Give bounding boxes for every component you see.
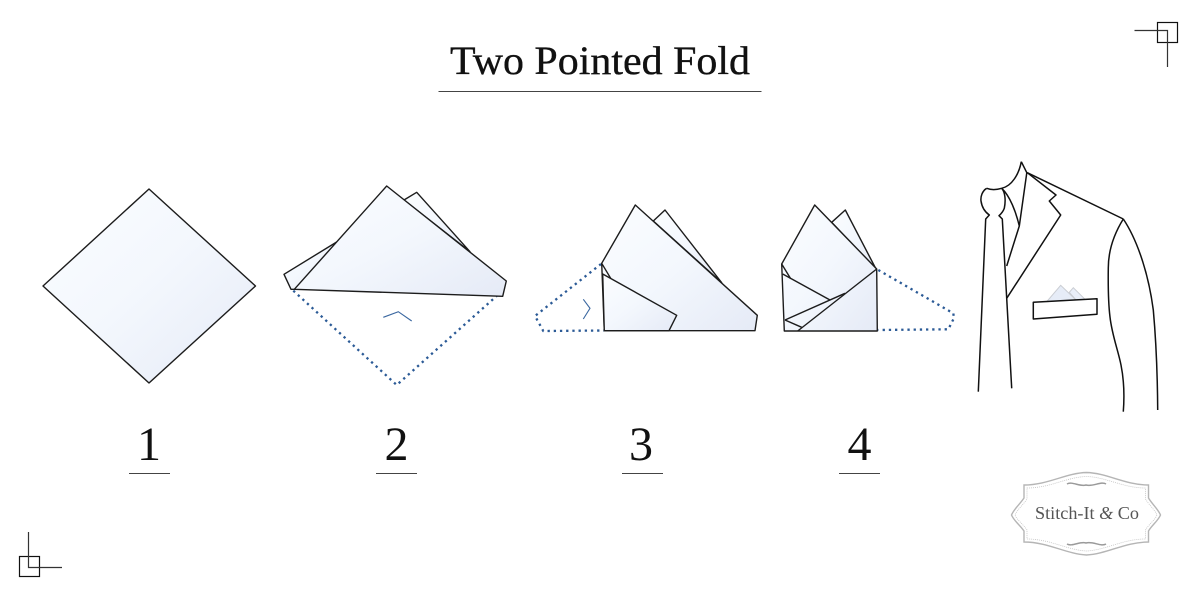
back layer — [832, 210, 876, 269]
tie — [978, 188, 1012, 392]
neck and collar — [987, 162, 1021, 190]
short crease — [602, 263, 611, 278]
number 2: 2 — [384, 418, 408, 471]
pocket square back — [1069, 288, 1085, 300]
number 3 — [622, 418, 663, 474]
front layer — [294, 186, 506, 296]
back layer right — [404, 192, 470, 252]
fold guide dots — [878, 270, 954, 330]
badge outline — [1012, 472, 1160, 555]
fold guide dots — [535, 264, 604, 331]
number 2 — [376, 418, 417, 474]
corner mark: bottom left — [20, 532, 62, 576]
fold creases — [782, 264, 877, 331]
ornament top — [1067, 483, 1106, 485]
badge inner dotted border — [1015, 476, 1157, 551]
step 2: first fold — [284, 186, 506, 385]
pocket square front — [1047, 285, 1076, 302]
front layer — [602, 205, 757, 331]
shoulder — [1027, 173, 1123, 219]
jacket illustration — [978, 162, 1158, 412]
corner mark: top right — [1134, 22, 1178, 67]
ornament bottom — [1067, 543, 1106, 545]
title: Two Pointed Fold — [450, 38, 750, 83]
number 1: 1 — [137, 418, 161, 471]
sleeve outer — [1123, 219, 1158, 410]
breast pocket — [1033, 299, 1097, 319]
lapel — [1007, 173, 1061, 298]
fold arrow — [583, 299, 590, 319]
number 3: 3 — [629, 418, 653, 471]
back layer left — [284, 241, 338, 289]
step 3: left corner fold — [535, 205, 757, 331]
pocket outline — [782, 205, 877, 331]
brand name: Stitch-It & Co — [1035, 503, 1139, 523]
step numbers — [129, 418, 880, 474]
step 4: right corner fold — [782, 205, 954, 331]
number 1 — [129, 418, 170, 474]
fold arrow — [383, 312, 412, 321]
number 4 — [839, 418, 880, 474]
inner flap — [603, 274, 677, 331]
back layer — [653, 210, 722, 283]
sleeve inner — [1108, 219, 1124, 412]
fold guide dots — [293, 291, 497, 385]
logo badge — [1012, 472, 1160, 555]
step 1: flat square — [43, 189, 256, 383]
number 4: 4 — [848, 418, 872, 471]
shirt collar — [1002, 162, 1027, 266]
